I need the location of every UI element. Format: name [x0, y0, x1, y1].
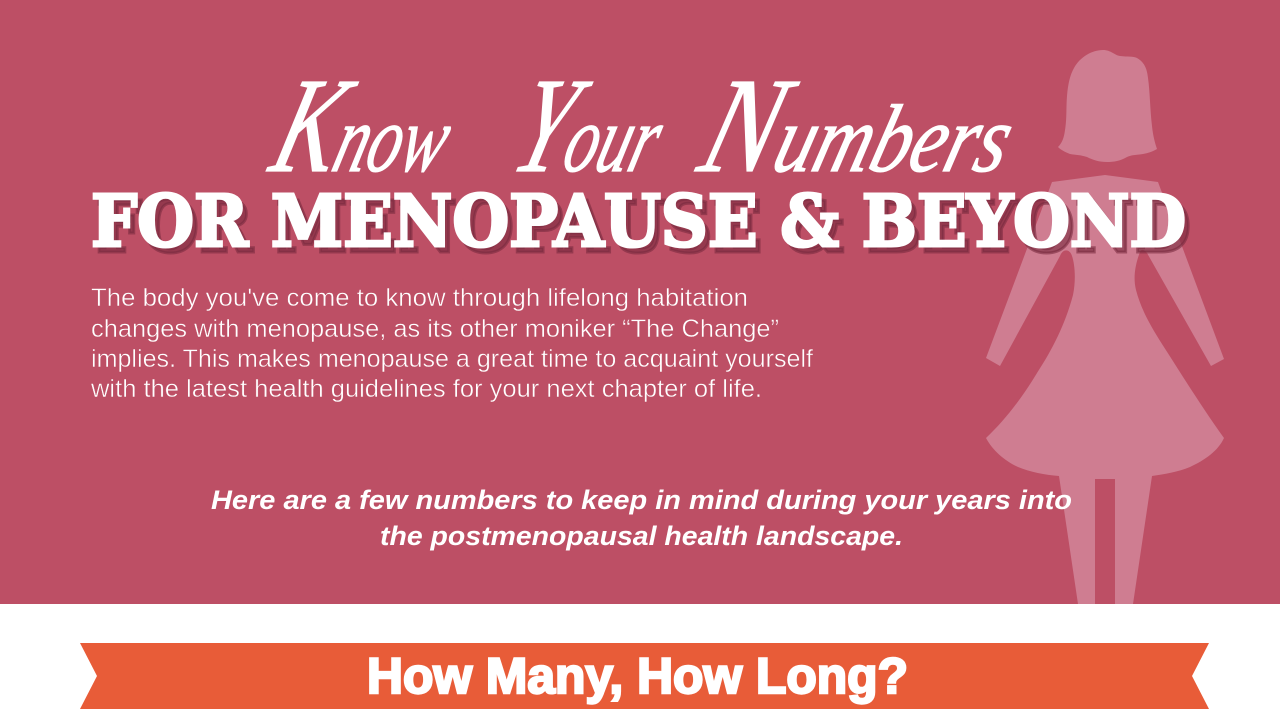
subtitle text: FOR MENOPAUSE & BEYOND: [91, 179, 1186, 263]
title word: Know: Know: [257, 50, 474, 201]
text block: introduction: The body you've come to know through lifelong habitation: [91, 284, 748, 312]
icon: woman silhouette: [986, 50, 1224, 604]
text block: call to action: [211, 485, 1072, 551]
banner: How Many, How Long?: [80, 643, 1209, 709]
title word: Numbers: Numbers: [685, 50, 1036, 201]
title word: Your: Your: [499, 50, 685, 201]
text block: introduction: changes with menopause, as its other moniker “The Change”: [91, 315, 779, 343]
title: Know Your Numbers: [257, 50, 1036, 201]
subtitle shadow: FOR MENOPAUSE & BEYOND: [96, 185, 1191, 269]
text block: call to action: Here are a few numbers to keep in mind during your years into: [211, 485, 1072, 515]
silhouette hair and head: [1058, 50, 1157, 162]
text block: call to action: the postmenopausal health landscape.: [380, 521, 903, 551]
banner heading: How Many, How Long?: [367, 648, 908, 704]
banner ribbon: [80, 643, 1209, 709]
silhouette body and dress: [986, 175, 1224, 604]
text block: introduction: implies. This makes menopause a great time to acquaint yourself: [91, 345, 813, 373]
text block: introduction: [90, 284, 813, 403]
text block: introduction: with the latest health guidelines for your next chapter of life.: [90, 375, 762, 403]
subtitle: For Menopause and Beyond: [91, 179, 1191, 269]
